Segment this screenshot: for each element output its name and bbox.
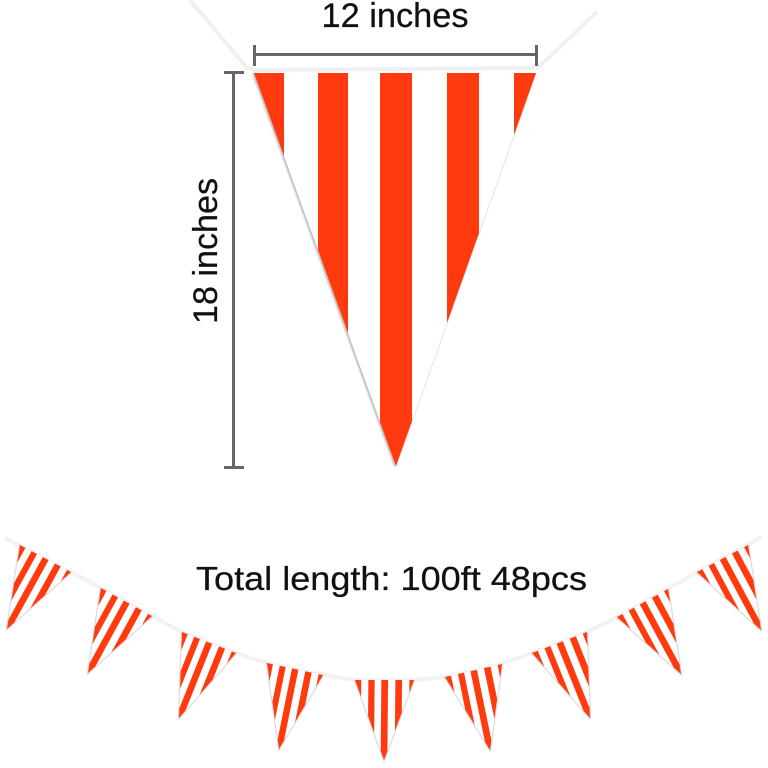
total length caption: Total length: 100ft 48pcs: [196, 560, 587, 597]
pennant 6: [445, 664, 518, 757]
pennant 9: [697, 545, 768, 644]
hanging string: large flag: [190, 0, 597, 70]
bottom bunting flags: [0, 545, 768, 760]
hanging string: bottom bunting: [5, 537, 762, 680]
width dimension: 12 inches: [253, 0, 538, 66]
pennant 1: [0, 545, 71, 642]
pennant 3: [152, 632, 236, 728]
pennant 4: [251, 663, 323, 755]
height dimension: 18 inches: 18 inches: [187, 178, 225, 324]
pennant 5: [354, 680, 414, 760]
pennant 7: [532, 632, 617, 729]
pennant 8: [617, 589, 706, 688]
height dimension: 18 inches: [187, 71, 244, 469]
large striped pennant: [254, 73, 536, 466]
pennant 2: [62, 588, 152, 687]
